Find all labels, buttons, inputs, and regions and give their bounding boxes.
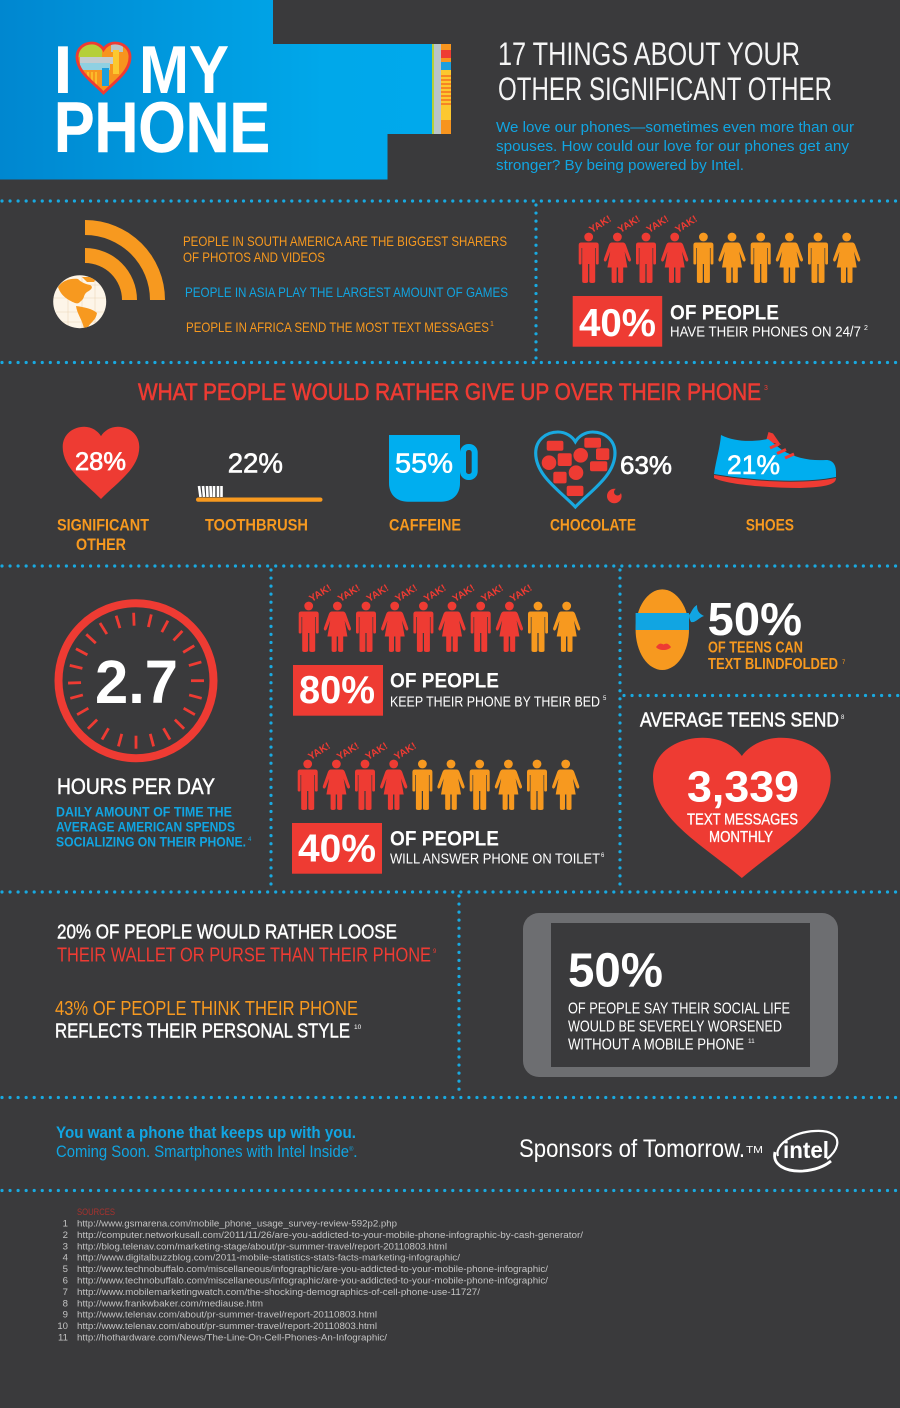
title: I <box>54 32 72 108</box>
sources list: http://blog.telenav.com/marketing-stage/about/pr-summer-travel/report-20110803.html <box>77 1241 447 1252</box>
pictogram: 4 of 10 people yak <box>579 214 860 283</box>
text: personal style fact: 43% OF PEOPLE THINK THEIR PHONE <box>55 998 358 1020</box>
text: hours per day <box>56 774 252 850</box>
stat: 40% on toilet: 40% <box>298 828 376 871</box>
footer tagline: ® <box>349 1146 354 1153</box>
item: chocolate <box>536 432 672 535</box>
sources list: http://hothardware.com/News/The-Line-On-Cell-Phones-An-Infographic/ <box>77 1332 387 1344</box>
item: shoes: 21% <box>727 450 780 480</box>
stat: 80% by bed <box>293 665 607 716</box>
item: shoes: SHOES <box>746 516 794 535</box>
heading: what people would give up: WHAT PEOPLE WOULD RATHER GIVE UP OVER THEIR PHONE <box>138 379 761 406</box>
header banner <box>0 0 451 180</box>
stat: 40% phones on <box>573 296 868 347</box>
stat: 40% on toilet <box>292 823 605 874</box>
pictogram: 4 of 10 people yak, toilet: YAK! <box>335 741 361 763</box>
pictogram: 8 of 10 people yak: YAK! <box>479 583 506 605</box>
pictogram: 4 of 10 people yak: YAK! <box>616 214 642 236</box>
sponsors of tomorrow: Sponsors of Tomorrow. <box>519 1135 745 1163</box>
text: regional facts: PEOPLE IN SOUTH AMERICA ARE THE BIGGEST SHARERS <box>183 233 507 249</box>
sources list: 10 <box>57 1321 68 1332</box>
item: caffeine: CAFFEINE <box>389 516 461 535</box>
pictogram: 8 of 10 people yak: YAK! <box>422 583 448 605</box>
sources list: 8 <box>63 1298 68 1309</box>
subtitle: 17 THINGS ABOUT YOUR <box>498 36 800 72</box>
sources list: http://computer.networkusall.com/2011/11/26/are-you-addicted-to-your-mobile-phone-infographic-by-cash-generator/ <box>77 1230 583 1241</box>
sources list: http://www.technobuffalo.com/miscellaneous/infographic/are-you-addicted-to-your-mobile-phone-infographic/ <box>77 1264 548 1275</box>
phone: 50% social life: WOULD BE SEVERELY WORSENED <box>568 1019 782 1036</box>
sources list: 1 <box>63 1218 68 1230</box>
text: regional facts: PEOPLE IN ASIA PLAY THE LARGEST AMOUNT OF GAMES <box>185 284 508 300</box>
sources list: 6 <box>63 1276 68 1286</box>
sources list <box>57 1207 583 1344</box>
pictogram: 4 of 10 people yak: YAK! <box>673 214 700 236</box>
intro text <box>496 119 854 174</box>
stat: 40% phones on: 40% <box>579 302 656 345</box>
item: significant other: 28% <box>75 448 126 476</box>
icon: wifi signal globe <box>53 220 165 329</box>
item: caffeine <box>389 435 475 535</box>
stat: 40% phones on: OF PEOPLE <box>670 301 779 324</box>
stat: 80% by bed: OF PEOPLE <box>390 670 499 693</box>
phone: 50% social life: OF PEOPLE SAY THEIR SOCIAL LIFE <box>568 1001 790 1018</box>
item: toothbrush: TOOTHBRUSH <box>205 516 308 535</box>
title <box>58 42 268 153</box>
text: wallet fact: THEIR WALLET OR PURSE THAN THEIR PHONE <box>57 945 431 967</box>
text: personal style fact: REFLECTS THEIR PERSONAL STYLE <box>55 1020 350 1042</box>
text: regional facts: PEOPLE IN AFRICA SEND THE MOST TEXT MESSAGES <box>186 319 489 335</box>
sources list: 11 <box>58 1332 68 1344</box>
pictogram: 8 of 10 people yak: YAK! <box>451 583 477 605</box>
phone: 50% social life: 11 <box>748 1038 755 1045</box>
footer tagline: You want a phone that keeps up with you. <box>56 1123 356 1142</box>
sources list: http://www.gsmarena.com/mobile_phone_usage_survey-review-592p2.php <box>77 1218 397 1230</box>
pictogram: 8 of 10 people yak: YAK! <box>508 583 534 605</box>
stat: 50% teens blindfolded: TEXT BLINDFOLDED <box>708 656 838 673</box>
footer tagline: . <box>353 1142 358 1161</box>
stat: 40% phones on: HAVE THEIR PHONES ON 24/7 <box>670 324 861 341</box>
item: chocolate: CHOCOLATE <box>550 516 636 535</box>
intro text: We love our phones—sometimes even more than our <box>496 119 854 136</box>
pictogram: 8 of 10 people yak: YAK! <box>307 583 334 605</box>
text: hours per day: DAILY AMOUNT OF TIME THE <box>56 805 232 820</box>
pictogram: 4 of 10 people yak, toilet: YAK! <box>306 741 333 763</box>
pictogram: 8 of 10 people yak <box>299 583 580 652</box>
heading: what people would give up: 3 <box>764 385 768 392</box>
text: personal style fact <box>55 998 362 1042</box>
item: toothbrush <box>196 448 322 535</box>
text: wallet fact: 20% OF PEOPLE WOULD RATHER LOOSE <box>57 921 397 943</box>
title: PHONE <box>54 89 270 168</box>
sources list: SOURCES <box>77 1207 115 1218</box>
stat: 80% by bed: KEEP THEIR PHONE BY THEIR BED <box>390 694 600 711</box>
intro text: spouses. How could our love for our phones get any <box>496 138 850 155</box>
phone: 50% social life: WITHOUT A MOBILE PHONE <box>568 1036 744 1053</box>
item: shoes <box>714 432 836 535</box>
item: chocolate: 63% <box>620 452 672 480</box>
text: wallet fact <box>57 921 437 967</box>
logo: intel <box>775 1131 837 1171</box>
sources list: http://www.telenav.com/about/pr-summer-travel/report-20110803.html <box>77 1310 377 1321</box>
icon: patterned heart <box>77 43 130 93</box>
text: personal style fact: 10 <box>354 1024 362 1031</box>
text: regional facts: 1 <box>490 321 494 328</box>
stat: 40% on toilet: WILL ANSWER PHONE ON TOILET <box>390 850 600 867</box>
stat: 40% phones on: 2 <box>864 325 868 332</box>
sources list: 3 <box>63 1241 68 1252</box>
sources list: http://www.frankwbaker.com/mediause.htm <box>77 1298 263 1309</box>
title: MY <box>139 32 229 108</box>
subtitle <box>498 36 832 107</box>
item: significant other <box>57 427 150 554</box>
stat: 40% on toilet: OF PEOPLE <box>390 828 499 851</box>
sources list: 9 <box>63 1310 68 1321</box>
intro text: stronger? By being powered by Intel. <box>496 157 744 174</box>
footer tagline <box>56 1123 358 1161</box>
heart: 3,339 text messages: 3,339 <box>687 763 799 812</box>
text: hours per day: HOURS PER DAY <box>57 774 215 799</box>
text: wallet fact: 9 <box>433 949 437 955</box>
icon: blindfolded face <box>636 589 704 670</box>
pictogram: 8 of 10 people yak: YAK! <box>336 583 362 605</box>
stat: 80% by bed: 80% <box>299 669 375 712</box>
stat: 50% teens blindfolded <box>708 593 846 673</box>
logo: intel: intel <box>783 1137 829 1163</box>
pictogram: 8 of 10 people yak: YAK! <box>365 583 391 605</box>
phone: 50% social life <box>523 913 838 1077</box>
heading: average teens send: AVERAGE TEENS SEND <box>640 710 839 732</box>
stat: 40% on toilet: 6 <box>601 853 605 859</box>
pictogram: 8 of 10 people yak: YAK! <box>393 583 420 605</box>
text: regional facts <box>183 233 508 335</box>
sponsors of tomorrow: TM <box>746 1144 763 1156</box>
item: significant other: OTHER <box>76 535 126 554</box>
heart: 3,339 text messages <box>653 738 831 878</box>
text: regional facts: OF PHOTOS AND VIDEOS <box>183 249 325 265</box>
pictogram: 4 of 10 people yak, toilet: YAK! <box>392 741 419 763</box>
sources list: http://www.mobilemarketingwatch.com/the-shocking-demographics-of-cell-phone-use-11727/ <box>77 1287 480 1298</box>
pictogram: 4 of 10 people yak, toilet <box>298 741 579 810</box>
sources list: http://www.technobuffalo.com/miscellaneous/infographic/are-you-addicted-to-your-mobile-phone-infographic/ <box>77 1276 548 1286</box>
sources list: 5 <box>63 1264 68 1275</box>
heart: 3,339 text messages: TEXT MESSAGES <box>687 811 798 828</box>
pictogram: 4 of 10 people yak: YAK! <box>587 214 614 236</box>
icon: processor chip strip <box>432 44 451 134</box>
footer tagline: Coming Soon. Smartphones with Intel Inside <box>56 1142 349 1161</box>
text: hours per day: SOCIALIZING ON THEIR PHONE. <box>56 835 246 850</box>
item: significant other: SIGNIFICANT <box>57 516 150 535</box>
heart: 3,339 text messages: MONTHLY <box>709 829 773 846</box>
sources list: 4 <box>63 1253 69 1264</box>
text: hours per day: AVERAGE AMERICAN SPENDS <box>56 820 235 835</box>
pictogram: 4 of 10 people yak, toilet: YAK! <box>364 741 390 763</box>
pictogram: 4 of 10 people yak: YAK! <box>645 214 671 236</box>
stat: 80% by bed: 5 <box>603 696 607 702</box>
stat: 50% teens blindfolded: 50% <box>708 593 802 645</box>
phone: 50% social life: 50% <box>568 945 663 998</box>
text: hours per day: 4 <box>248 837 252 843</box>
sources list: http://www.telenav.com/about/pr-summer-travel/report-20110803.html <box>77 1321 377 1332</box>
clock: 2.7 hours <box>58 603 214 758</box>
stat: 50% teens blindfolded: 7 <box>842 660 846 666</box>
clock: 2.7 hours: 2.7 <box>95 648 178 716</box>
heading: average teens send: 8 <box>841 715 845 721</box>
stat: 50% teens blindfolded: OF TEENS CAN <box>708 639 803 656</box>
sources list: 7 <box>63 1287 68 1298</box>
item: caffeine: 55% <box>395 448 453 479</box>
sources list: 2 <box>63 1230 68 1241</box>
sources list: http://www.digitalbuzzblog.com/2011-mobile-statistics-stats-facts-marketing-infographic/ <box>77 1253 460 1264</box>
item: toothbrush: 22% <box>228 448 283 479</box>
